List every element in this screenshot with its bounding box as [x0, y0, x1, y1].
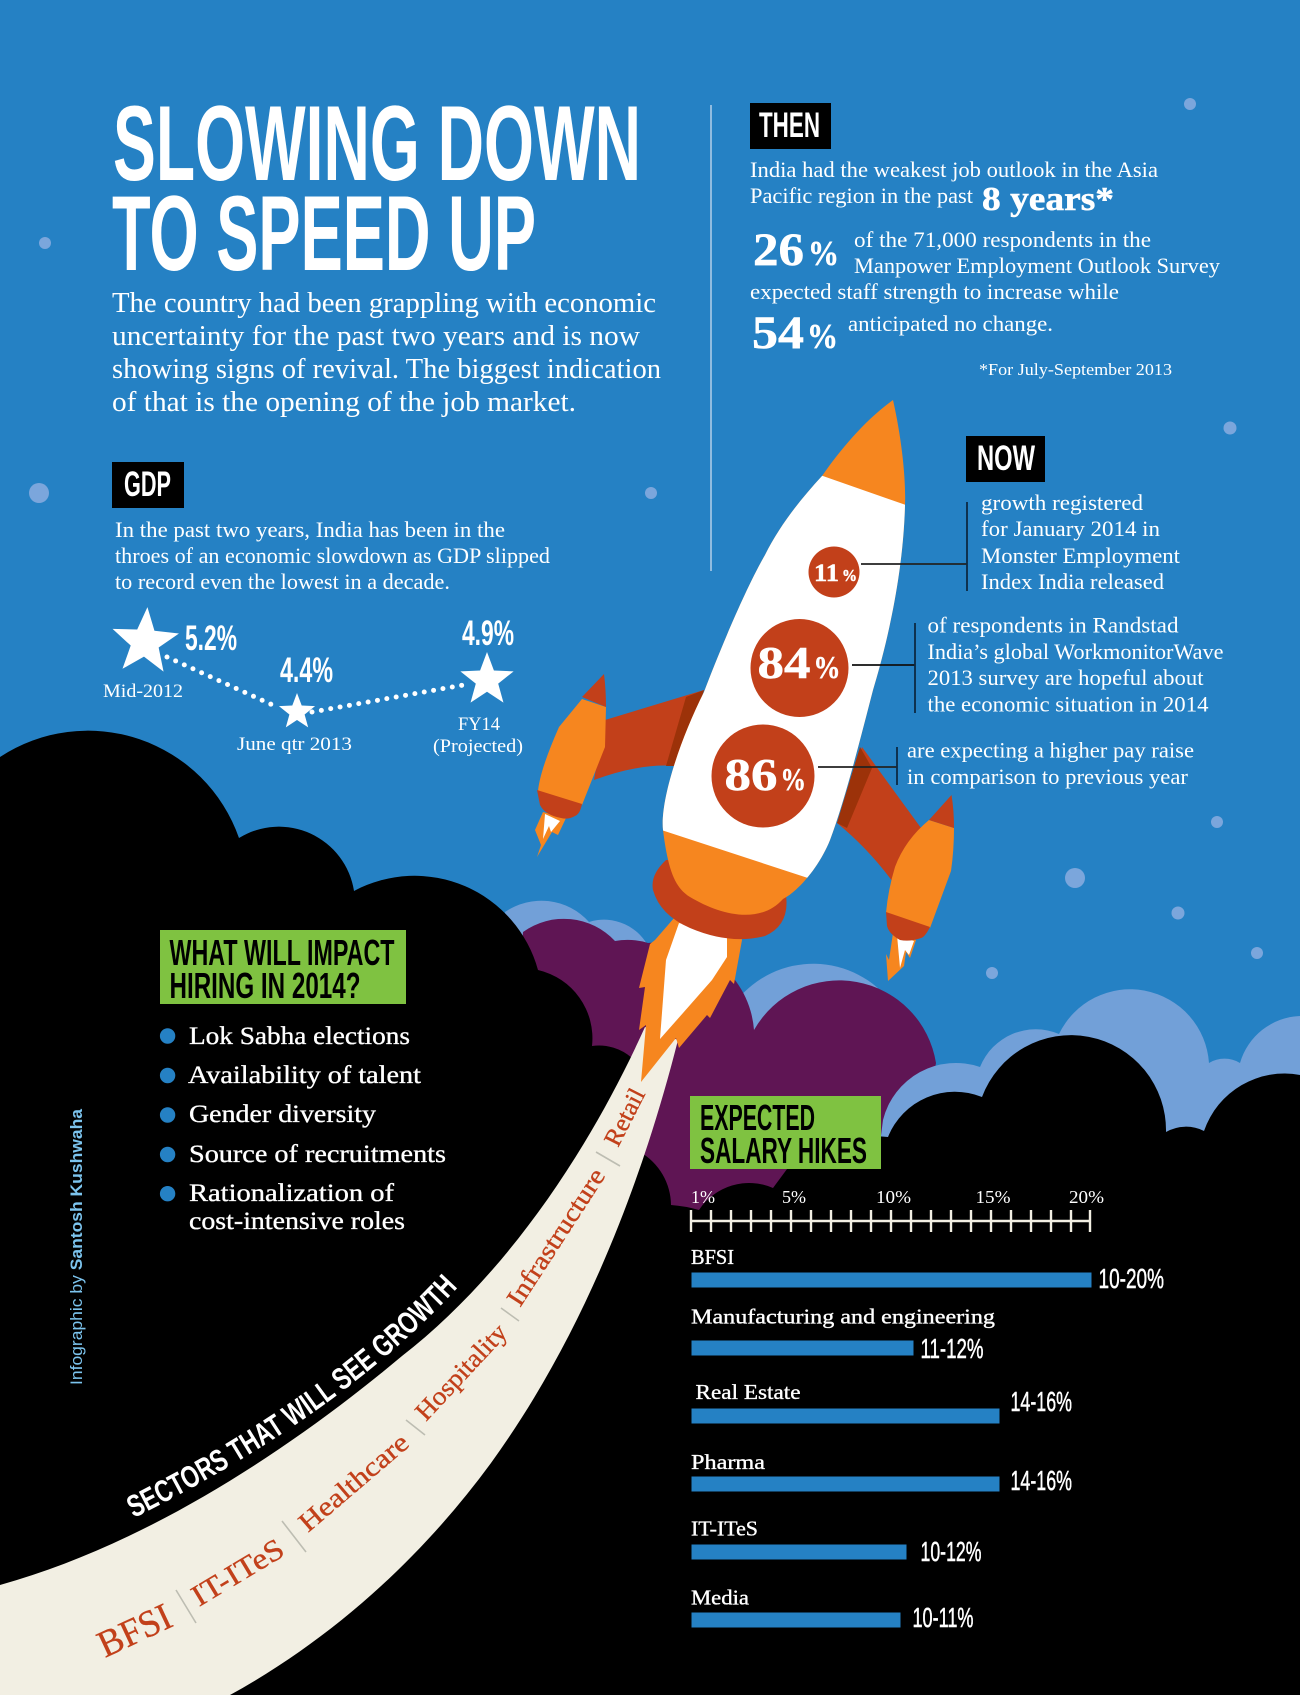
title: SLOWING DOWN: [113, 83, 641, 203]
GDP star chart: June qtr 2013: [237, 734, 352, 755]
GDP star chart: 4.4%: [280, 651, 333, 690]
left booster: [535, 674, 606, 857]
expected salary hikes heading: SALARY HIKES: [700, 1130, 867, 1171]
salary bar chart: Real Estate: [696, 1380, 800, 1404]
what will impact hiring panel: HIRING IN 2014?: [170, 965, 360, 1006]
right booster: [886, 795, 954, 981]
GDP heading: [112, 462, 184, 508]
salary bar chart: Pharma: [691, 1450, 766, 1474]
THEN heading: [750, 103, 831, 149]
NOW 11 percent text: [981, 490, 1180, 594]
THEN text: expected staff strength to increase while: [750, 279, 1119, 304]
THEN text: [750, 157, 1220, 379]
GDP text: to record even the lowest in a decade.: [115, 569, 450, 594]
purple cloud: [500, 919, 936, 1250]
left arm: [594, 690, 704, 780]
sector names: Healthcare: [292, 1427, 415, 1538]
salary scale: [691, 1187, 1104, 1232]
what will impact hiring panel: Gender diversity: [189, 1101, 377, 1128]
NOW heading: NOW: [977, 439, 1035, 478]
intro text: [112, 288, 661, 418]
NOW 11 percent text: for January 2014 in: [981, 516, 1160, 541]
THEN text: %: [807, 317, 838, 356]
84 percent badge: 84: [758, 638, 810, 688]
11 percent badge: [808, 546, 860, 598]
84 percent badge: [750, 619, 848, 717]
light blue cloud right: [860, 989, 1300, 1300]
salary bar chart: Manufacturing and engineering: [691, 1304, 996, 1328]
salary bar chart: 11-12%: [920, 1333, 984, 1364]
THEN text: 54: [752, 307, 804, 359]
GDP star chart: 5.2%: [185, 619, 237, 658]
what will impact hiring panel: Availability of talent: [188, 1062, 421, 1089]
salary scale: 20%: [1069, 1187, 1104, 1207]
divider: [710, 105, 712, 571]
NOW 11 percent text: growth registered: [981, 490, 1143, 515]
THEN text: *For July-September 2013: [979, 360, 1172, 379]
rocket: [535, 390, 960, 1082]
THEN text: of the 71,000 respondents in the: [854, 227, 1151, 252]
intro text: showing signs of revival. The biggest indication: [112, 354, 661, 385]
11 percent badge: %: [842, 566, 857, 585]
callout lines: [818, 502, 967, 785]
NOW 84 percent text: the economic situation in 2014: [928, 692, 1208, 716]
salary bar chart: BFSI: [691, 1245, 734, 1269]
title: [112, 83, 641, 293]
THEN text: India had the weakest job outlook in the Asia: [750, 157, 1158, 182]
rocket body: [662, 400, 906, 915]
NOW 84 percent text: of respondents in Randstad: [928, 612, 1178, 638]
NOW 84 percent text: 2013 survey are hopeful about: [928, 665, 1204, 690]
sector names: Infrastructure: [501, 1163, 611, 1311]
light blue clouds behind: [505, 901, 900, 1060]
sectors heading: SECTORS THAT WILL SEE GROWTH: [127, 1274, 457, 1516]
GDP text: throes of an economic slowdown as GDP slipped: [115, 543, 550, 568]
title: TO SPEED UP: [112, 173, 536, 293]
credit: Infographic by Santosh Kushwaha: [67, 1108, 86, 1385]
what will impact hiring panel: WHAT WILL IMPACT: [170, 932, 394, 973]
NOW 84 percent text: India’s global WorkmonitorWave: [928, 639, 1224, 664]
GDP heading: GDP: [124, 465, 171, 504]
salary bar chart: 14-16%: [1010, 1465, 1072, 1496]
86 percent badge: 86: [724, 750, 778, 800]
THEN text: anticipated no change.: [848, 311, 1053, 336]
sector names: IT-ITeS: [186, 1532, 290, 1613]
GDP star chart: 4.9%: [462, 614, 514, 653]
THEN text: 8 years*: [982, 181, 1114, 218]
84 percent badge: %: [814, 649, 840, 685]
THEN text: Pacific region in the past: [750, 183, 973, 208]
what will impact hiring panel: [160, 930, 446, 1235]
what will impact hiring panel: Lok Sabha elections: [189, 1023, 410, 1050]
salary scale: 15%: [976, 1187, 1010, 1207]
NOW 86 percent text: [907, 738, 1194, 789]
intro text: of that is the opening of the job market.: [112, 387, 576, 418]
intro text: The country had been grappling with economic: [112, 288, 656, 319]
black cloud ground: [0, 731, 1300, 1695]
what will impact hiring panel: cost-intensive roles: [189, 1208, 405, 1235]
base ring: [653, 860, 787, 939]
NOW 86 percent text: are expecting a higher pay raise: [907, 738, 1194, 762]
rocket exhaust stream: [0, 1027, 678, 1695]
11 percent badge: 11: [814, 560, 839, 587]
86 percent badge: [712, 724, 814, 828]
salary bar chart: [691, 1245, 1164, 1633]
86 percent badge: %: [780, 761, 806, 797]
salary bar chart: 10-20%: [1098, 1263, 1164, 1294]
sector names: Retail: [599, 1084, 651, 1151]
sky dots: [29, 98, 1263, 979]
GDP text: [115, 517, 550, 594]
salary bar chart: 10-11%: [912, 1602, 974, 1633]
GDP star chart: (Projected): [433, 736, 523, 757]
THEN heading: THEN: [759, 106, 820, 145]
intro text: uncertainty for the past two years and is now: [112, 321, 641, 352]
THEN text: %: [808, 234, 839, 273]
sector names: BFSI: [91, 1596, 179, 1666]
what will impact hiring panel: Source of recruitments: [189, 1141, 446, 1168]
GDP text: In the past two years, India has been in the: [115, 517, 505, 542]
expected salary hikes heading: EXPECTED: [700, 1097, 815, 1138]
salary bar chart: 14-16%: [1010, 1386, 1072, 1417]
NOW heading: [966, 436, 1045, 482]
THEN text: Manpower Employment Outlook Survey: [854, 253, 1220, 278]
salary scale: 10%: [876, 1187, 911, 1207]
sector names: Hospitality: [409, 1318, 513, 1426]
salary scale: 5%: [782, 1187, 806, 1207]
NOW 11 percent text: Index India released: [981, 569, 1164, 594]
right arm: [837, 747, 921, 885]
salary bar chart: 10-12%: [920, 1536, 982, 1567]
salary bar chart: Media: [691, 1586, 750, 1610]
GDP star chart: FY14: [458, 714, 500, 735]
sector names: [91, 1084, 651, 1666]
GDP star chart: [103, 605, 523, 757]
main flame: [639, 910, 742, 1082]
NOW 11 percent text: Monster Employment: [981, 543, 1180, 568]
what will impact hiring panel: Rationalization of: [189, 1180, 395, 1207]
THEN text: 26: [753, 224, 804, 276]
salary bar chart: IT-ITeS: [691, 1516, 758, 1540]
expected salary hikes heading: [690, 1096, 881, 1171]
GDP star chart: Mid-2012: [103, 681, 183, 702]
salary scale: 1%: [691, 1187, 715, 1207]
NOW 86 percent text: in comparison to previous year: [907, 764, 1189, 789]
NOW 84 percent text: [928, 612, 1224, 716]
